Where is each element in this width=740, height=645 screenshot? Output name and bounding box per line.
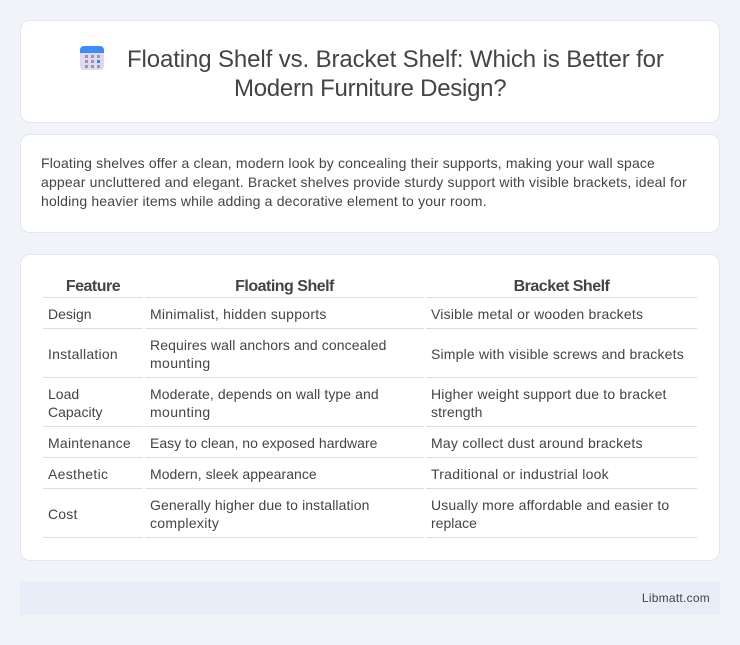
introduction text: appear uncluttered and elegant. Bracket shelves provide sturdy support with visible brackets, ideal for [41,174,687,190]
row: Aesthetic: Modern, sleek appearance [150,466,317,482]
row: Load Capacity: Higher weight support due to bracket [431,386,667,402]
row: Installation [48,337,684,371]
row: Load Capacity: Load [48,386,79,402]
row: Load Capacity: Capacity [48,404,102,420]
row: Aesthetic: Traditional or industrial look [431,466,609,482]
row: Installation: Installation [48,346,118,362]
row: Load Capacity: Moderate, depends on wall type and [150,386,379,402]
column header: Bracket Shelf: Bracket Shelf [514,278,609,295]
column header: Floating Shelf: Floating Shelf [235,278,334,295]
footer credit: Libmatt.com [642,591,710,605]
row: Maintenance [48,435,643,451]
row: Design: Design [48,306,92,322]
title line 2: Modern Furniture Design? [234,75,506,102]
row: Design [48,306,643,322]
title line 1: Floating Shelf vs. Bracket Shelf: Which is Better for [127,46,664,73]
row: Installation: mounting [150,355,211,371]
comparison table [43,278,697,538]
column header: Feature: Feature [66,278,120,295]
introduction text: Floating shelves offer a clean, modern look by concealing their supports, making your wall space [41,155,655,171]
row: Cost: replace [431,515,477,531]
row: Maintenance: May collect dust around brackets [431,435,643,451]
icon: calendar [80,46,104,70]
row: Load Capacity: strength [431,404,483,420]
introduction text: holding heavier items while adding a decorative element to your room. [41,193,487,209]
row: Maintenance: Maintenance [48,435,131,451]
row: Load Capacity [48,386,667,420]
row: Design: Visible metal or wooden brackets [431,306,643,322]
row: Load Capacity: mounting [150,404,211,420]
row: Cost: complexity [150,515,219,531]
footer bar [20,582,720,615]
panel: introduction card [20,134,720,233]
panel: title card [20,20,720,123]
row: Installation: Simple with visible screws and brackets [431,346,684,362]
panel: comparison table card [20,254,720,561]
introduction text [41,155,687,209]
row: Maintenance: Easy to clean, no exposed hardware [150,435,378,451]
row: Cost: Generally higher due to installation [150,497,370,513]
row: Cost: Usually more affordable and easier to [431,497,669,513]
row: Cost: Cost [48,506,78,522]
row: Design: Minimalist, hidden supports [150,306,327,322]
row: Aesthetic [48,466,609,482]
row: Cost [48,497,669,531]
row: Aesthetic: Aesthetic [48,466,108,482]
row: Installation: Requires wall anchors and concealed [150,337,387,353]
